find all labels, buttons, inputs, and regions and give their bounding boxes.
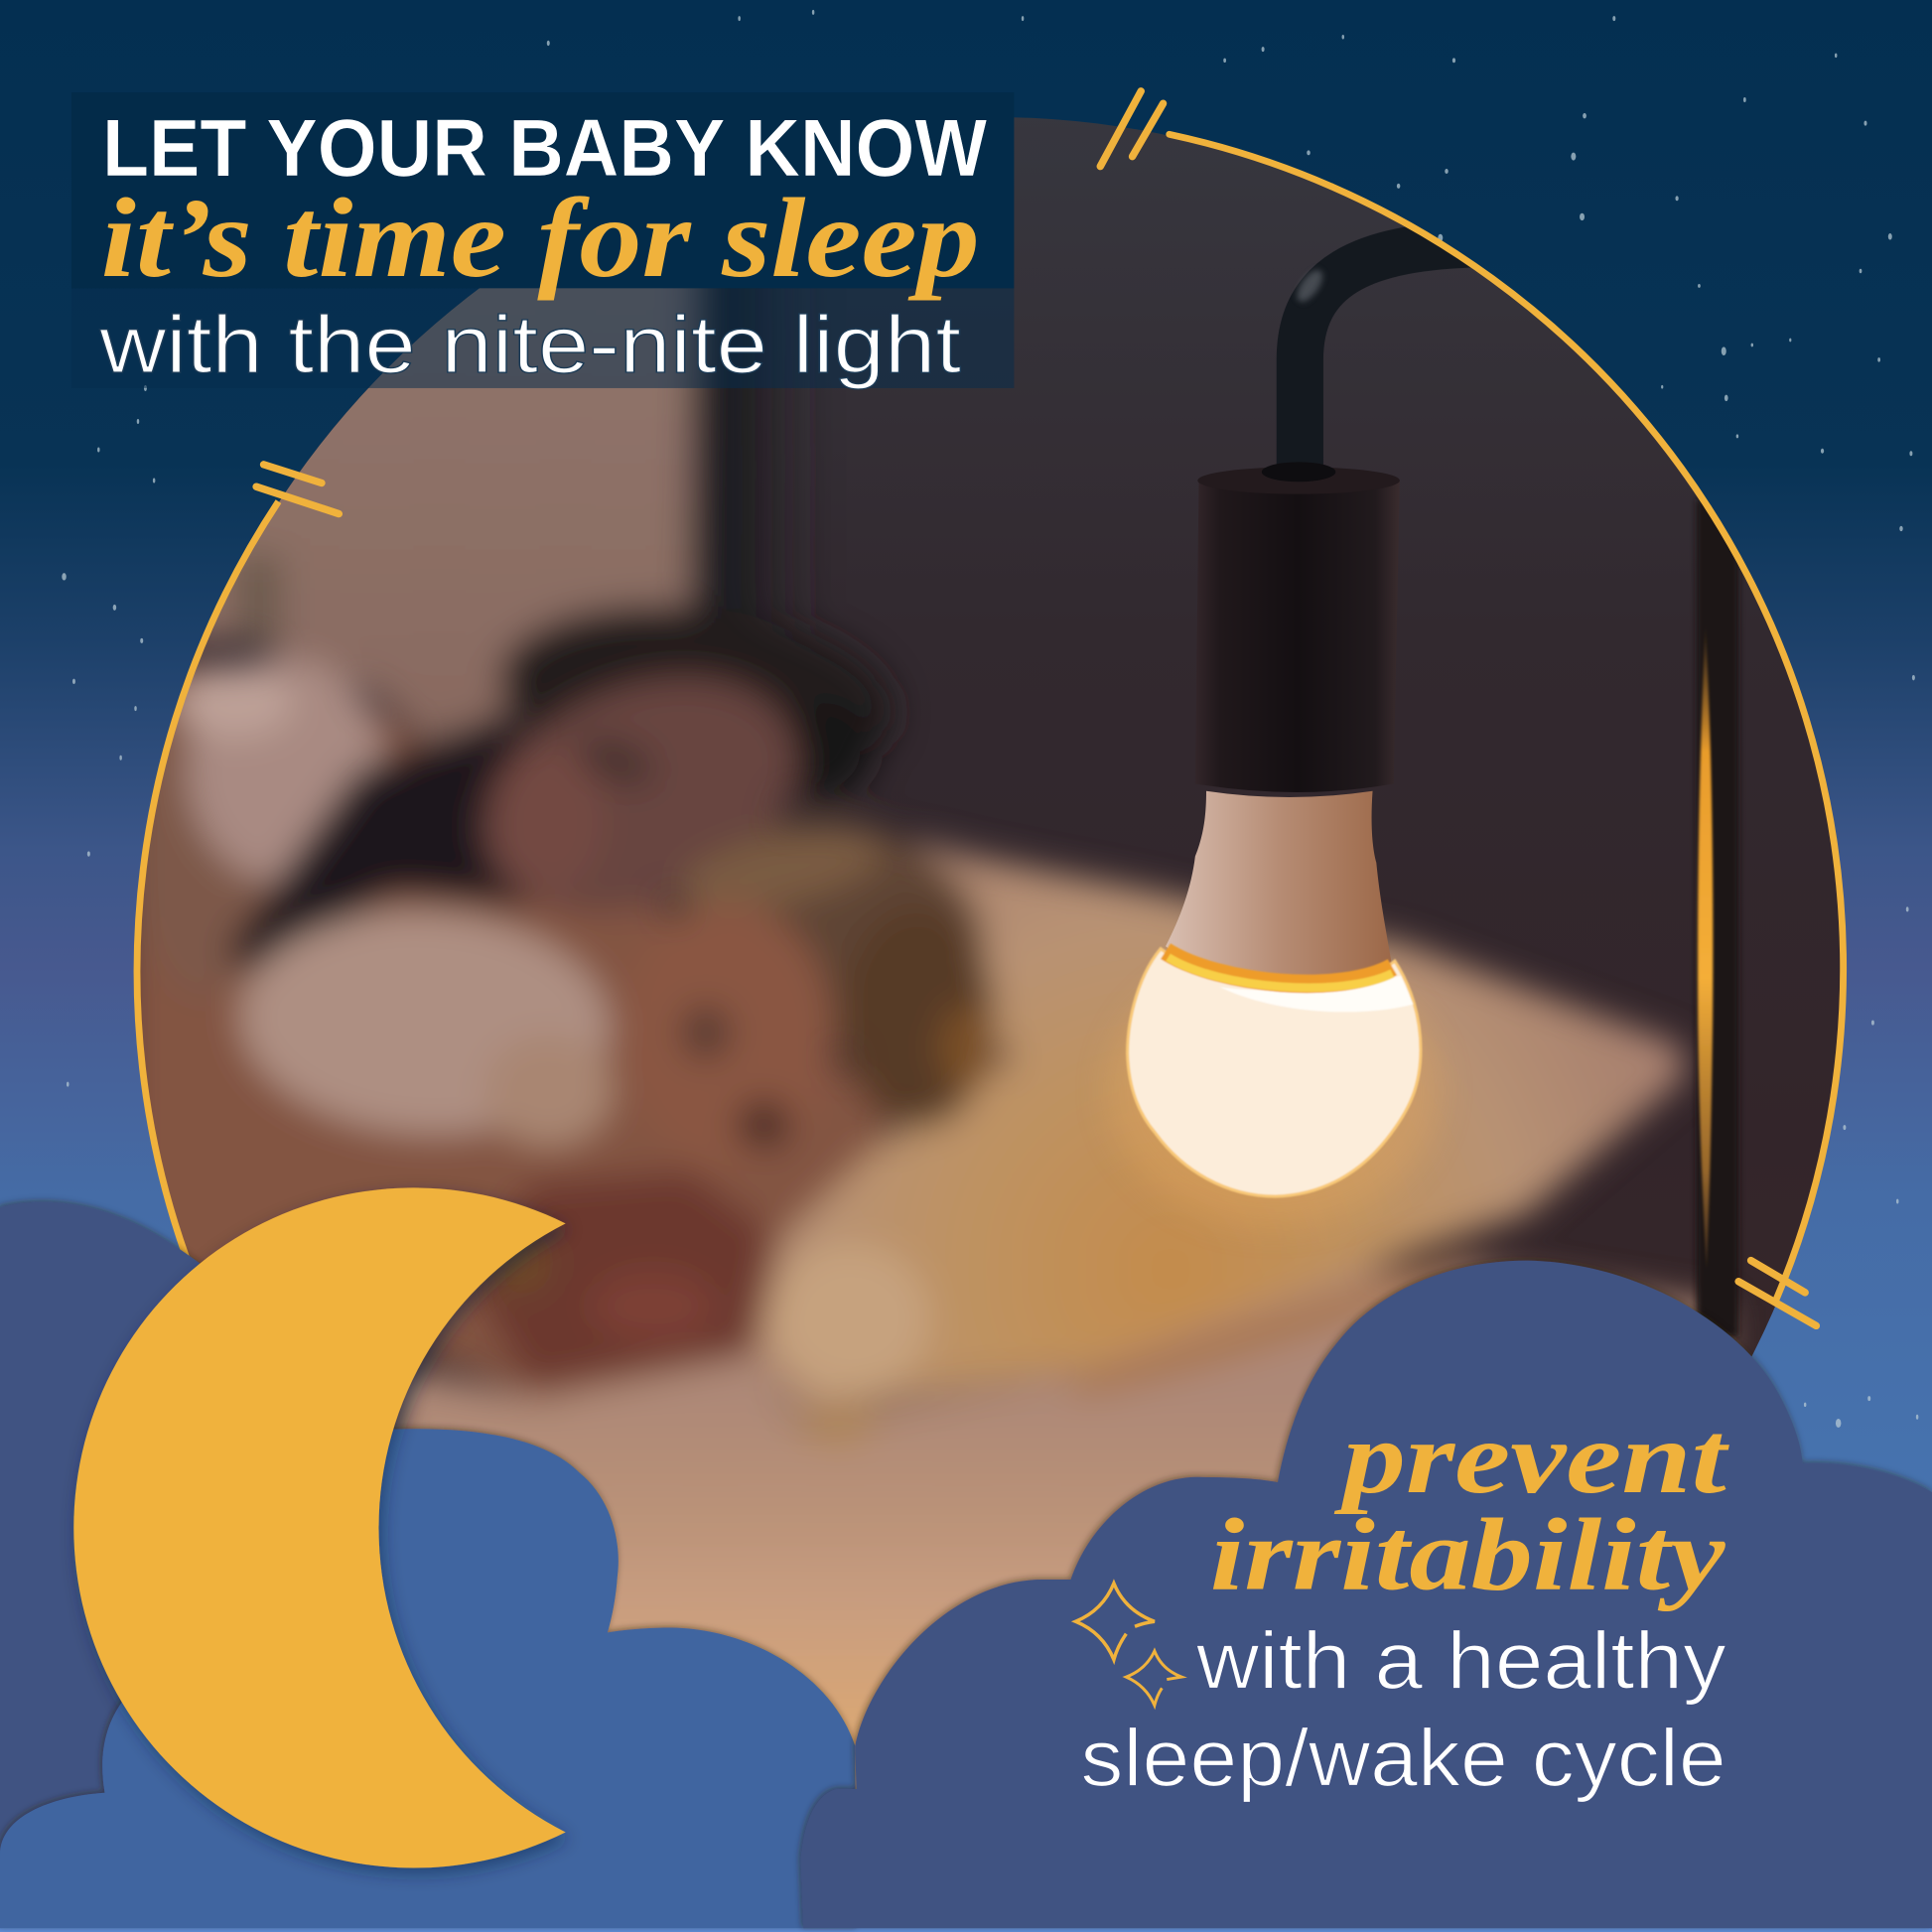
tick marks: top: [1100, 91, 1164, 167]
gold ring arc: left: [137, 501, 278, 1257]
callout line: sleep/wake cycle: sleep/wake cycle: [1080, 1713, 1726, 1803]
callout line: prevent: prevent: [1333, 1400, 1729, 1515]
title line 2 script: it’s time for sleep: [101, 175, 980, 301]
tick marks: right: [1738, 1261, 1816, 1325]
title line 1: LET YOUR BABY KNOW: [102, 103, 988, 194]
icon: sparkle large: [1075, 1584, 1155, 1660]
crescent moon: [73, 1187, 566, 1867]
back cloud left: [0, 1202, 215, 1872]
tick marks: left: [256, 465, 339, 514]
blue cloud: [0, 1429, 857, 1928]
stars: [62, 10, 1918, 1428]
lamp socket: [1195, 462, 1400, 792]
gold ring arc: right: [1170, 134, 1844, 1302]
callout line: irritability: irritability: [1210, 1496, 1725, 1611]
title panel: [71, 92, 1014, 390]
callout text: [1080, 1400, 1729, 1803]
light bulb globe: [1128, 949, 1421, 1196]
callout line: with a healthy: with a healthy: [1195, 1615, 1726, 1706]
bulb glow halo: [1112, 1035, 1438, 1221]
title line 3: with the nite-nite light: [98, 300, 961, 390]
front cloud right: [801, 1261, 1932, 1928]
lamp arm: [1292, 244, 1478, 475]
light bulb neck: [1166, 791, 1392, 986]
blurred scene: mother and child in bed: [140, 288, 1749, 1789]
icon: sparkle small: [1126, 1651, 1181, 1706]
floor lamp post with glow: [1697, 499, 1738, 1337]
